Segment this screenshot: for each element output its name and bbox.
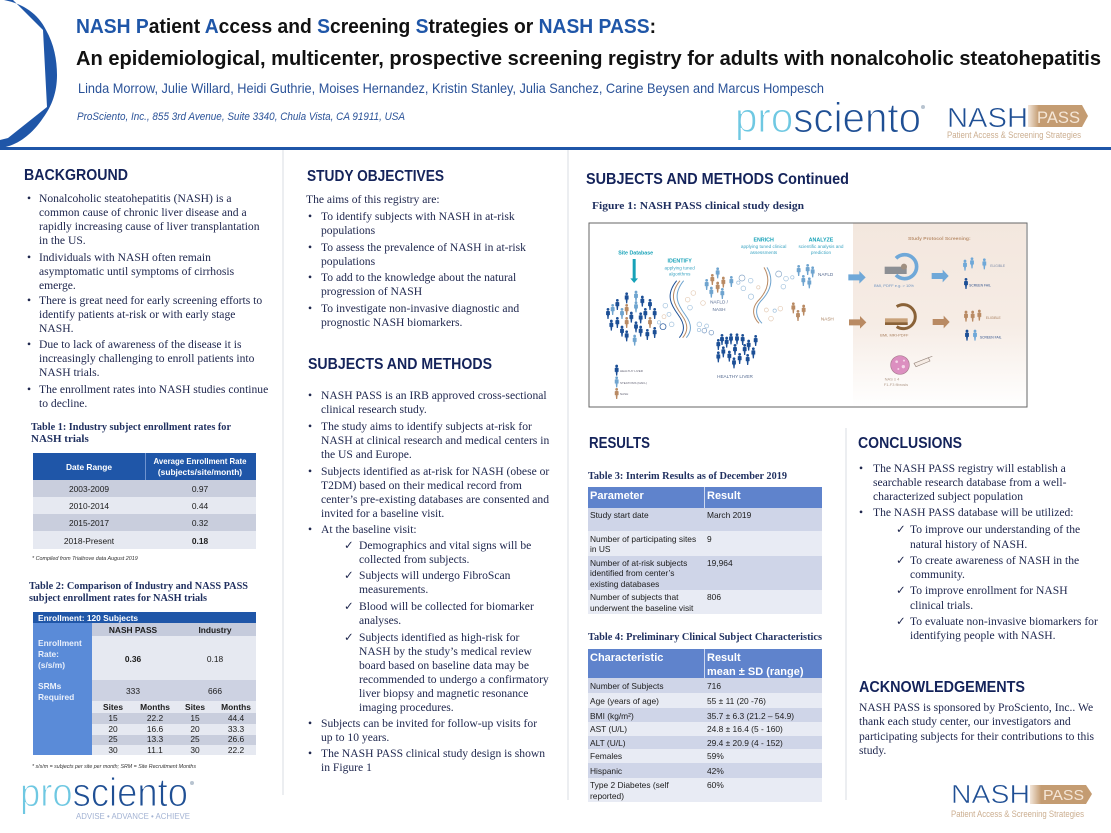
table 1: 0.44 xyxy=(192,501,208,511)
text block: methods: At the baseline visit: xyxy=(321,523,417,536)
authors: Linda Morrow, Julie Willard, Heidi Guthrie, Moises Hernandez, Kristin Stanley, Julia Sanchez, Carine Beysen and Marcus Hompesch xyxy=(78,80,824,96)
text block: background bullets: in the US. xyxy=(39,234,86,247)
logo: NASH PASS bottom xyxy=(951,779,1092,819)
heading: acknowledgements: ACKNOWLEDGEMENTS xyxy=(859,679,1025,696)
text block: methods: liver biopsy and magnetic resonance xyxy=(359,687,528,700)
text block: background bullets: NASH trials. xyxy=(39,366,100,379)
table 2: Sites xyxy=(103,702,123,712)
caption: table 1 xyxy=(31,421,231,445)
table 2: 22.2 xyxy=(228,745,244,755)
text block: acknowledgements xyxy=(859,701,1095,757)
text block: objectives: • xyxy=(308,271,312,284)
text block: acknowledgements: NASH PASS is sponsored by ProSciento, Inc.. We xyxy=(859,701,1093,714)
table 1: 2015-2017 xyxy=(69,518,109,528)
text block: methods: Subjects will undergo FibroScan xyxy=(359,569,511,582)
table 3: existing databases xyxy=(590,579,659,589)
left part of diagram: NAFLD xyxy=(818,272,834,277)
text block: conclusions: natural history of NASH. xyxy=(910,538,1027,551)
text block: methods: Demographics and vital signs will be xyxy=(359,539,531,552)
text block: conclusions: searchable research database from a well- xyxy=(873,476,1067,489)
table 2: Rate: xyxy=(38,649,59,659)
caption: figure 1: Figure 1: NASH PASS clinical study design xyxy=(592,200,804,212)
affiliation: ProSciento, Inc., 855 3rd Avenue, Suite 3340, Chula Vista, CA 91911, USA xyxy=(77,111,405,123)
table 2: Enrollment xyxy=(38,638,82,648)
text block: background bullets: to decline. xyxy=(39,397,87,410)
text block: background bullets: Individuals with NASH often remain xyxy=(39,251,211,264)
text block: objectives: To identify subjects with NASH in at-risk xyxy=(321,210,515,223)
text block: background bullets: emerge. xyxy=(39,279,76,292)
text block: background bullets: Due to lack of awareness of the disease it is xyxy=(39,338,242,351)
table 2: 25 xyxy=(108,734,118,744)
logo: NASH PASS bottom: Patient Access & Screening Strategies xyxy=(951,809,1084,819)
title: An epidemiological, multicenter, prospective screening registry for adults with nonalcoholic steatohepatitis xyxy=(76,48,1101,70)
table 1: 2018-Present xyxy=(64,536,115,546)
left part of diagram: HEALTHY LIVER xyxy=(620,369,644,373)
logo: NASH PASS bottom: PASS xyxy=(1043,787,1084,804)
left part of diagram: algorithms xyxy=(669,271,691,276)
table 2: 15 xyxy=(108,713,118,723)
caption: table 3: Table 3: Interim Results as of December 2019 xyxy=(588,470,787,482)
text block: background bullets: asymptomatic until symptoms of cirrhosis xyxy=(39,265,235,278)
title xyxy=(76,16,1101,70)
text block: objectives: • xyxy=(308,210,312,223)
text block: background bullets: • xyxy=(27,192,31,205)
text block: methods: ✓ xyxy=(344,538,354,552)
text block: conclusions: clinical trials. xyxy=(910,599,973,612)
left part of diagram: STEATOSIS (NAFL) xyxy=(620,381,647,385)
table 4: mean ± SD (range) xyxy=(707,666,804,678)
table 2: 26.6 xyxy=(228,734,244,744)
table 2: 0.36 xyxy=(125,654,141,664)
column dividers xyxy=(282,150,847,800)
text block: methods: ✓ xyxy=(344,599,354,613)
left part of diagram: assessments xyxy=(750,250,778,255)
text block: methods: analyses. xyxy=(359,614,401,627)
figure 1: study design diagram xyxy=(589,223,1027,407)
text block: acknowledgements: study. xyxy=(859,744,886,757)
text block: conclusions: • xyxy=(859,506,863,519)
text block: objectives: • xyxy=(308,241,312,254)
logo: ProSciento bottom: prosciento xyxy=(20,771,188,815)
table 3: 9 xyxy=(707,534,712,544)
logo: NASH PASS top: Patient Access & Screening Strategies xyxy=(947,130,1081,140)
table 4: Type 2 Diabetes (self xyxy=(590,780,669,790)
logo: ProSciento bottom: ADVISE • ADVANCE • ACHIEVE xyxy=(76,812,190,821)
text block: objectives: The aims of this registry are: xyxy=(306,193,440,206)
text block: conclusions: ✓ xyxy=(896,522,906,536)
table 1: Date Range xyxy=(66,462,112,472)
text block: methods: in Figure 1 xyxy=(321,761,372,774)
text block: methods: ✓ xyxy=(344,568,354,582)
right part of diagram: study protocol screening: BMI, PDFF e.g. > 10% xyxy=(874,283,914,288)
left part of diagram: IDENTIFY xyxy=(668,259,692,265)
left part of diagram: prediction xyxy=(811,250,831,255)
text block: conclusions: To evaluate non-invasive biomarkers for xyxy=(910,615,1098,628)
text block: background bullets: • xyxy=(27,294,31,307)
table 2: 333 xyxy=(126,686,140,696)
text block: methods: recommended to undergo a confirmatory xyxy=(359,673,549,686)
table 4: 716 xyxy=(707,681,721,691)
text block: conclusions: The NASH PASS database will be utilized: xyxy=(873,506,1074,519)
table 2: (s/s/m) xyxy=(38,660,65,670)
text block: methods: measurements. xyxy=(359,583,428,596)
left part of diagram: NASH xyxy=(713,307,725,312)
text block: conclusions: ✓ xyxy=(896,553,906,567)
header rule xyxy=(0,147,1111,150)
left part of diagram: NAFLD / xyxy=(710,300,729,305)
text block: conclusions: To improve enrollment for NASH xyxy=(910,584,1068,597)
left part of diagram: HEALTHY LIVER xyxy=(717,374,754,379)
logo: NASH PASS top: PASS xyxy=(1037,108,1080,127)
text block: methods: • xyxy=(308,420,312,433)
table 1: 2003-2009 xyxy=(69,484,109,494)
text block: methods xyxy=(308,389,549,774)
text block: objectives: To assess the prevalence of NASH in at-risk xyxy=(321,241,526,254)
text block: conclusions: characterized subject population xyxy=(873,490,1023,503)
table 2: 44.4 xyxy=(228,713,244,723)
text block: background bullets: • xyxy=(27,383,31,396)
text block: methods: Blood will be collected for biomarker xyxy=(359,600,534,613)
caption: table 2: Table 2: Comparison of Industry and NASS PASS xyxy=(29,580,248,592)
table 2: 22.2 xyxy=(147,713,163,723)
table 3: Number of subjects that xyxy=(590,592,679,602)
table 4: 59% xyxy=(707,751,724,761)
table 2: 16.6 xyxy=(147,724,163,734)
heading: conclusions: CONCLUSIONS xyxy=(858,435,962,452)
text block: methods: Subjects can be invited for follow-up visits for xyxy=(321,717,537,730)
table 1: 2010-2014 xyxy=(69,501,109,511)
text block: background bullets: • xyxy=(27,251,31,264)
footnote: table 1: * Compiled from Trialtrove data August 2019 xyxy=(32,556,138,562)
table 3: Number of participating sites xyxy=(590,534,696,544)
caption: table 2 xyxy=(29,580,248,604)
text block: background bullets: The enrollment rates into NASH studies continue xyxy=(39,383,268,396)
table 2: 33.3 xyxy=(228,724,244,734)
table 2: Sites xyxy=(185,702,205,712)
table 4: 60% xyxy=(707,780,724,790)
table 2: 0.18 xyxy=(207,654,223,664)
heading: subjects and methods continued: SUBJECTS AND METHODS Continued xyxy=(586,171,849,188)
table 3: Result xyxy=(707,490,741,502)
text block: methods: • xyxy=(308,465,312,478)
text block: acknowledgements: participating subjects for their contributions to this xyxy=(859,730,1095,743)
table 4: ALT (U/L) xyxy=(590,738,626,748)
right part of diagram: study protocol screening: SCREEN FAIL xyxy=(969,284,991,288)
table 4: 42% xyxy=(707,766,724,776)
logo: NASH PASS bottom: NASH xyxy=(951,779,1030,809)
table 2: Enrollment: 120 Subjects xyxy=(38,613,138,623)
left part of diagram: scientific analysis and xyxy=(798,244,844,249)
table 4: BMI (kg/m²) xyxy=(590,711,634,721)
text block: background bullets xyxy=(27,192,268,410)
heading: results: RESULTS xyxy=(589,435,650,452)
table 4: AST (U/L) xyxy=(590,724,627,734)
title: NASH Patient Access and Screening Strategies or NASH PASS: xyxy=(76,16,656,38)
caption: table 1: Table 1: Industry subject enrollment rates for xyxy=(31,421,231,433)
caption: table 2: subject enrollment rates for NASH trials xyxy=(29,592,208,604)
table 3: in US xyxy=(590,544,611,554)
right part of diagram: study protocol screening: ELIGIBLE xyxy=(990,264,1006,268)
text block: conclusions: identifying people with NASH. xyxy=(910,629,1056,642)
left part of diagram: applying tuned xyxy=(665,265,695,270)
table 2: 13.3 xyxy=(147,734,163,744)
table 2: Industry xyxy=(198,625,232,635)
text block: objectives: progression of NASH xyxy=(321,285,423,298)
text block: methods: imaging procedures. xyxy=(359,701,454,714)
table 4: 35.7 ± 6.3 (21.2 – 54.9) xyxy=(707,711,794,721)
text block: methods: ✓ xyxy=(344,630,354,644)
text block: background bullets: rapidly increasing cause of liver transplantation xyxy=(39,220,260,233)
left part of diagram: ENRICH xyxy=(753,237,774,243)
table 2: Months xyxy=(221,702,251,712)
text block: methods: the US and Europe. xyxy=(321,448,412,461)
table 2: 20 xyxy=(190,724,200,734)
table 4: Result xyxy=(707,652,741,664)
table 2 xyxy=(33,612,256,755)
footnote: table 2: * s/s/m = subjects per site per month; SRM = Site Recruitment Months xyxy=(32,764,196,770)
text block: methods: NASH PASS is an IRB approved cross-sectional xyxy=(321,389,547,402)
table 4: Number of Subjects xyxy=(590,681,664,691)
corner graphic: blue hexagon ring xyxy=(0,0,57,148)
table 3 xyxy=(588,487,822,614)
table 3: underwent the baseline visit xyxy=(590,603,694,613)
right part of diagram: study protocol screening: F1-F3 fibrosis xyxy=(884,382,908,387)
heading: study objectives: STUDY OBJECTIVES xyxy=(307,168,444,185)
table 3: 806 xyxy=(707,592,721,602)
table 4: 29.4 ± 20.9 (4 - 152) xyxy=(707,738,783,748)
text block: conclusions: • xyxy=(859,462,863,475)
text block: methods: NASH by the study’s medical review xyxy=(359,645,533,658)
table 1: 0.18 xyxy=(192,536,208,546)
table 4 xyxy=(588,649,822,802)
text block: background bullets: common cause of chronic liver disease and a xyxy=(39,206,247,219)
table 3: Parameter xyxy=(590,490,645,502)
text block: background bullets: NASH. xyxy=(39,322,74,335)
text block: objectives: To investigate non-invasive diagnostic and xyxy=(321,302,519,315)
text block: methods: • xyxy=(308,389,312,402)
text block: methods: • xyxy=(308,747,312,760)
heading: background: BACKGROUND xyxy=(24,167,128,184)
left part of diagram: ANALYZE xyxy=(809,237,834,243)
text block: background bullets: • xyxy=(27,338,31,351)
left part of diagram: NASH xyxy=(620,392,628,396)
left part of diagram: Site Database xyxy=(618,250,653,256)
text block: methods: Subjects identified as at-risk for NASH (obese or xyxy=(321,465,549,478)
right part of diagram: study protocol screening: ELIGIBLE xyxy=(986,316,1002,320)
text block: conclusions: To improve our understanding of the xyxy=(910,523,1080,536)
text block: objectives: To add to the knowledge about the natural xyxy=(321,271,516,284)
text block: background bullets: identify patients at-risk or with early stage xyxy=(39,308,235,321)
table 2: Months xyxy=(140,702,170,712)
text block: methods: clinical research study. xyxy=(321,403,427,416)
text block: methods: Subjects identified as high-risk for xyxy=(359,631,519,644)
text block: conclusions: The NASH PASS registry will establish a xyxy=(873,462,1066,475)
left part of diagram: NASH xyxy=(821,317,834,322)
text block: methods: • xyxy=(308,523,312,536)
text block: conclusions: To create awareness of NASH in the xyxy=(910,554,1079,567)
table 4: Females xyxy=(590,751,622,761)
table 1 xyxy=(33,453,256,549)
text block: background bullets: Nonalcoholic steatohepatitis (NASH) is a xyxy=(39,192,232,205)
table 2: NASH PASS xyxy=(109,625,158,635)
table 4: Hispanic xyxy=(590,766,622,776)
text block: methods: The NASH PASS clinical study design is shown xyxy=(321,747,545,760)
table 2: 30 xyxy=(108,745,118,755)
caption: table 1: NASH trials xyxy=(31,433,89,445)
text block: background bullets: There is great need for early screening efforts to xyxy=(39,294,262,307)
table 2: SRMs xyxy=(38,681,62,691)
table 2: Required xyxy=(38,692,74,702)
text block: methods: T2DM) based on their medical record from xyxy=(321,479,522,492)
text block: methods: The study aims to identify subjects at-risk for xyxy=(321,420,532,433)
caption: table 4: Table 4: Preliminary Clinical Subject Characteristics xyxy=(588,631,823,643)
table 4: Age (years of age) xyxy=(590,696,659,706)
text block: conclusions: ✓ xyxy=(896,614,906,628)
heading: subjects and methods: SUBJECTS AND METHODS xyxy=(308,356,492,373)
table 2: 25 xyxy=(190,734,200,744)
table 2: 30 xyxy=(190,745,200,755)
table 1: (subjects/site/month) xyxy=(158,467,242,477)
table 2: 666 xyxy=(208,686,222,696)
table 4: 55 ± 11 (20 -76) xyxy=(707,696,766,706)
table 1: Average Enrollment Rate xyxy=(154,456,247,466)
text block: methods: collected from subjects. xyxy=(359,553,470,566)
logo: NASH PASS top: NASH xyxy=(947,102,1028,133)
logo: NASH PASS top xyxy=(947,102,1088,140)
table 2: 20 xyxy=(108,724,118,734)
text block: methods: center’s pre-existing databases are consented and xyxy=(321,493,549,506)
text block: methods: NASH at clinical research and medical centers in xyxy=(321,434,549,447)
text block: methods: • xyxy=(308,717,312,730)
text block: conclusions xyxy=(859,462,1098,642)
text block: conclusions: community. xyxy=(910,568,965,581)
table 3: Study start date xyxy=(590,510,649,520)
right part of diagram: study protocol screening: NAS ≥ 4 xyxy=(885,377,900,382)
right part of diagram: study protocol screening: Study Protocol Screening: xyxy=(908,236,971,242)
table 3: identified from center’s xyxy=(590,568,674,578)
table 1: 0.32 xyxy=(192,518,208,528)
left part of diagram: applying tuned clinical xyxy=(741,244,786,249)
table 3: 19,964 xyxy=(707,558,733,568)
text block: methods: up to 10 years. xyxy=(321,731,389,744)
text block: objectives: populations xyxy=(321,224,376,237)
table 3: Number of at-risk subjects xyxy=(590,558,687,568)
text block: objectives: • xyxy=(308,302,312,315)
right part of diagram: study protocol screening xyxy=(848,236,1006,387)
table 4: reported) xyxy=(590,791,624,801)
text block: conclusions: ✓ xyxy=(896,583,906,597)
text block: background bullets: increasingly challenging to enroll patients into xyxy=(39,352,255,365)
text block: objectives: prognostic NASH biomarkers. xyxy=(321,316,462,329)
table 4: Characteristic xyxy=(590,652,663,664)
text block: objectives xyxy=(306,193,526,329)
text block: acknowledgements: thank each study center, our investigators and xyxy=(859,715,1071,728)
text block: methods: invited for a baseline visit. xyxy=(321,507,444,520)
text block: methods: board based on baseline data may be xyxy=(359,659,529,672)
table 1: 0.97 xyxy=(192,484,208,494)
table 4: 24.8 ± 16.4 (5 - 160) xyxy=(707,724,783,734)
right part of diagram: study protocol screening: SCREEN FAIL xyxy=(980,336,1002,340)
text block: objectives: populations xyxy=(321,255,376,268)
logo: ProSciento top: prosciento xyxy=(735,94,921,141)
table 2: 15 xyxy=(190,713,200,723)
right part of diagram: study protocol screening: BMI, MRI-PDFF xyxy=(880,333,909,338)
left part of diagram xyxy=(606,237,844,399)
table 2: 11.1 xyxy=(147,745,163,755)
table 3: March 2019 xyxy=(707,510,752,520)
